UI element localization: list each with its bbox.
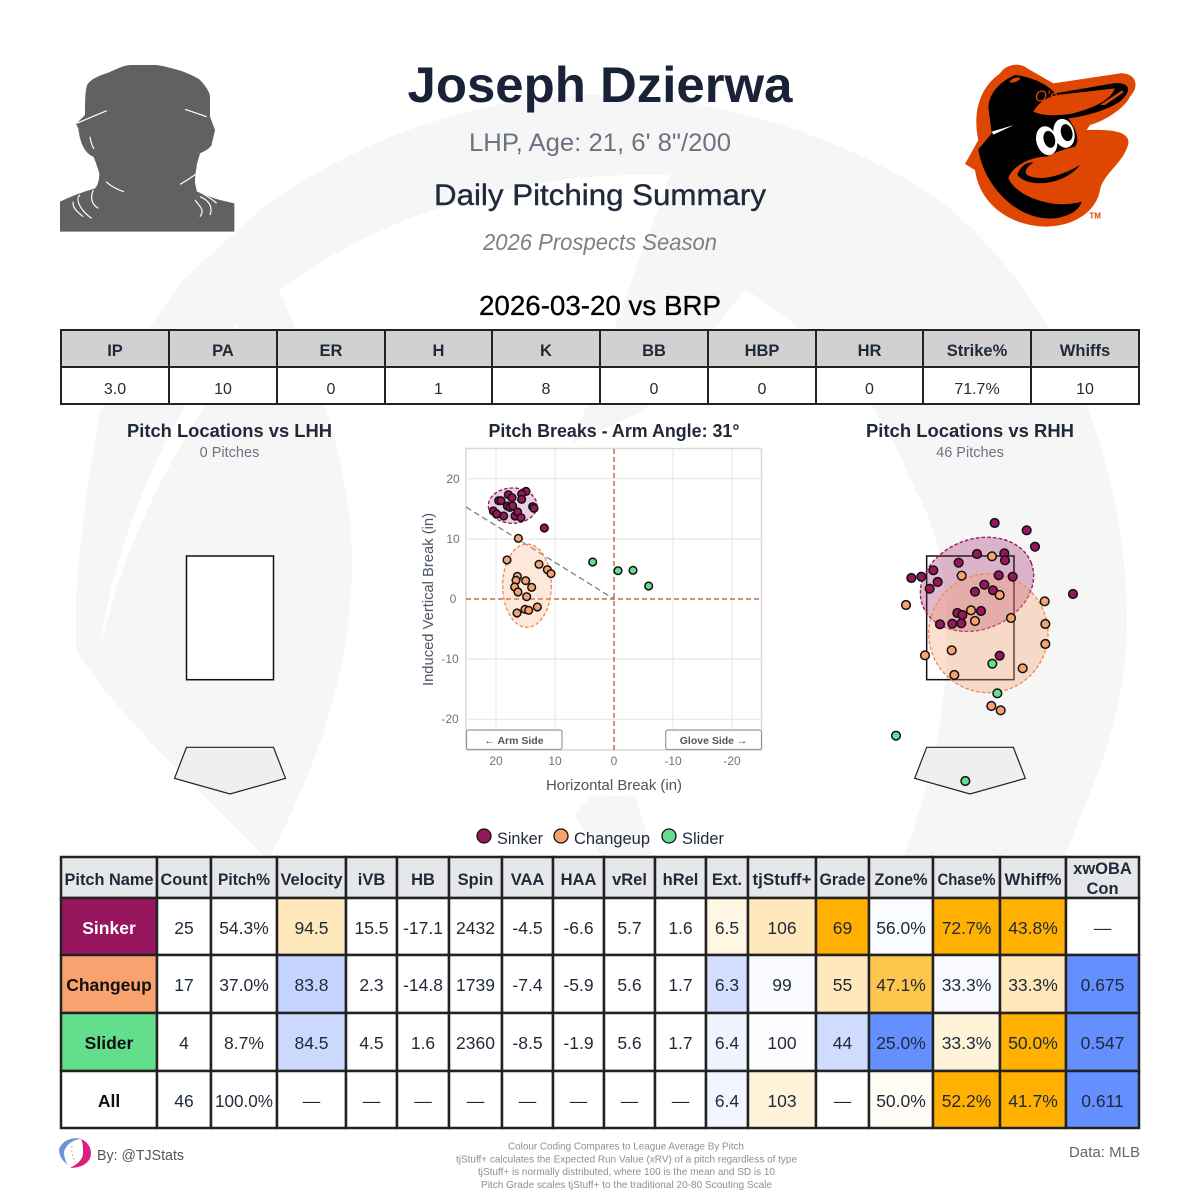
stats table header row: IP (107, 342, 123, 360)
row: Slider (61, 1013, 1139, 1071)
table header row: hRel (663, 871, 698, 889)
row: All: 46 (174, 1091, 194, 1111)
row: Sinker: 6.5 (715, 918, 739, 938)
stats table values row: 71.7% (954, 381, 1000, 398)
row: Slider: 0.547 (1081, 1033, 1124, 1053)
row: Changeup: 5.6 (617, 975, 642, 995)
row: All: — (303, 1091, 321, 1111)
glove side label: Glove Side → (680, 735, 747, 747)
table header row: Pitch% (218, 871, 270, 889)
row: Changeup: 33.3% (1008, 975, 1058, 995)
table header row: Spin (458, 871, 493, 889)
sinker location points (907, 519, 1077, 660)
y axis ticks: 0 (450, 592, 457, 606)
stats table header row: Whiffs (1060, 342, 1110, 360)
y axis ticks: 10 (446, 532, 460, 546)
x axis ticks: -20 (723, 754, 741, 768)
row: Slider: 5.6 (617, 1033, 642, 1053)
changeup location ellipse (929, 574, 1048, 693)
glove side label (666, 730, 762, 750)
y axis ticks (441, 472, 460, 726)
y axis ticks: -10 (441, 652, 459, 666)
heading: locations vs LHH: Pitch Locations vs LHH (127, 420, 332, 441)
row: Sinker: 54.3% (219, 918, 269, 938)
row: Changeup: 1.7 (668, 975, 693, 995)
table header row: vRel (612, 871, 647, 889)
icon: TJStats logo (59, 1138, 91, 1168)
row: Sinker: -17.1 (403, 918, 443, 938)
stats table header row: BB (642, 342, 666, 360)
stats table header row: HR (858, 342, 881, 360)
subtitle: Daily Pitching Summary (434, 179, 766, 212)
icon: Orioles team logo: TM (1089, 211, 1101, 220)
pitch count RHH: 46 Pitches (936, 445, 1004, 461)
title: player name: Joseph Dzierwa (408, 57, 794, 113)
row: Sinker: 72.7% (942, 918, 991, 938)
stats table values row: 10 (1076, 381, 1094, 398)
row: All: 103 (767, 1091, 797, 1111)
row: Slider: 2360 (456, 1033, 495, 1053)
home plate LHH (174, 747, 286, 794)
data source: Data: MLB (1069, 1145, 1140, 1161)
row: Changeup (61, 955, 1139, 1013)
row: All: 6.4 (715, 1091, 739, 1111)
row: Sinker: 106 (767, 918, 797, 938)
row: Sinker: 56.0% (876, 918, 926, 938)
row: Changeup: 83.8 (294, 975, 329, 995)
row: Changeup: 33.3% (942, 975, 991, 995)
slider location points (892, 659, 1002, 785)
row: Slider: 25.0% (876, 1033, 926, 1053)
heading: pitch breaks: Pitch Breaks - Arm Angle: 31° (488, 420, 740, 441)
stats table values row: 0 (865, 381, 874, 398)
row: Slider: 84.5 (294, 1033, 329, 1053)
row: Sinker: 25 (174, 918, 194, 938)
row: Sinker: 69 (833, 918, 852, 938)
x axis label: Horizontal Break (in) (546, 778, 682, 794)
row: All: — (519, 1091, 537, 1111)
row: Sinker: Sinker (82, 918, 136, 938)
table header row: Chase% (938, 871, 996, 889)
player silhouette headshot (60, 65, 234, 232)
legend (477, 829, 724, 848)
table header row: Grade (820, 871, 866, 889)
row: All: 52.2% (942, 1091, 991, 1111)
pitch count LHH: 0 Pitches (200, 445, 259, 461)
row: Sinker: 1.6 (668, 918, 693, 938)
stats table header row: H (433, 342, 444, 360)
stats table values row: 0 (327, 381, 336, 398)
table header row: Count (160, 871, 208, 889)
stats table values row: 0 (758, 381, 767, 398)
row: Slider: 44 (833, 1033, 852, 1053)
season label: 2026 Prospects Season (482, 229, 717, 255)
row: Sinker (61, 898, 1139, 955)
stats table values row: 1 (434, 381, 443, 398)
row: All: — (834, 1091, 852, 1111)
row: Changeup: 0.675 (1081, 975, 1124, 995)
row: All: — (414, 1091, 432, 1111)
table header row (61, 857, 1139, 898)
x axis ticks: 20 (489, 754, 503, 768)
row: Changeup: 37.0% (219, 975, 269, 995)
row: All: — (570, 1091, 588, 1111)
strike zone LHH (186, 556, 274, 680)
row: All (61, 1071, 1139, 1128)
row: Slider: 4.5 (359, 1033, 384, 1053)
footnotes: tjStuff+ is normally distributed, where 100 is the mean and SD is 10 (478, 1166, 775, 1178)
panel: pitch locations vs RHH (866, 420, 1077, 794)
changeup break points (503, 534, 555, 617)
stats table header row: K (540, 342, 552, 360)
row: Sinker: -4.5 (512, 918, 543, 938)
table header row: HB (411, 871, 435, 889)
row: Sinker: — (1094, 918, 1112, 938)
row: Slider: -1.9 (563, 1033, 594, 1053)
footnotes: tjStuff+ calculates the Expected Run Value (xRV) of a pitch regardless of type (456, 1154, 797, 1166)
table header row: xwOBA (1073, 860, 1132, 878)
row: Sinker: 15.5 (354, 918, 389, 938)
row: Slider: 4 (179, 1033, 189, 1053)
row: Changeup: 1739 (456, 975, 495, 995)
plot area with grid (466, 448, 762, 750)
stats table header row: HBP (745, 342, 779, 360)
arm side label: ← Arm Side (484, 735, 544, 747)
footnotes (456, 1140, 797, 1191)
table header row: Pitch Name (64, 871, 154, 889)
row: Changeup: 47.1% (876, 975, 926, 995)
stats table values row: 0 (650, 381, 659, 398)
row: Slider: 8.7% (224, 1033, 264, 1053)
row: Slider: 50.0% (1008, 1033, 1058, 1053)
legend: Sinker (497, 829, 543, 848)
table header row: HAA (561, 871, 596, 889)
row: All: 50.0% (876, 1091, 926, 1111)
row: Changeup: 17 (174, 975, 194, 995)
player bio: LHP, Age: 21, 6' 8"/200 (469, 129, 731, 157)
table header row: Zone% (874, 871, 928, 889)
stats table values row: 8 (542, 381, 551, 398)
row: Changeup: 6.3 (715, 975, 739, 995)
row: Sinker: 94.5 (294, 918, 329, 938)
x axis ticks: 10 (548, 754, 562, 768)
sinker location ellipse (906, 521, 1048, 648)
row: Sinker: 43.8% (1008, 918, 1058, 938)
arm side label (466, 730, 562, 750)
y axis label: Induced Vertical Break (in) (421, 513, 437, 686)
panel: pitch breaks chart (421, 420, 762, 794)
stats table header row: ER (320, 342, 343, 360)
legend: Changeup (574, 829, 650, 848)
row: All: — (363, 1091, 381, 1111)
changeup location points (902, 552, 1050, 715)
strike zone RHH (927, 556, 1014, 680)
row: Slider: 100 (767, 1033, 797, 1053)
table header row: Velocity (280, 871, 343, 889)
sinker break ellipse (488, 488, 537, 523)
icon: Orioles team logo: O's (1035, 89, 1058, 106)
y axis ticks: 20 (446, 472, 460, 486)
table header row: Whiff% (1004, 871, 1062, 889)
row: All: 100.0% (215, 1091, 273, 1111)
stats table header row: PA (212, 342, 234, 360)
footnotes: Colour Coding Compares to League Average By Pitch (508, 1140, 744, 1152)
row: Changeup: 55 (833, 975, 852, 995)
stats table values row (61, 367, 1139, 404)
changeup break ellipse (503, 544, 551, 627)
row: Slider: 1.6 (411, 1033, 435, 1053)
y axis ticks: -20 (441, 712, 459, 726)
row: Changeup: -5.9 (563, 975, 594, 995)
stats table values row: 3.0 (104, 381, 126, 398)
row: Changeup: -7.4 (512, 975, 543, 995)
row: Changeup: 99 (772, 975, 792, 995)
panel: pitch locations vs LHH (127, 420, 332, 794)
row: All: All (98, 1091, 120, 1111)
stats table header row (61, 330, 1139, 367)
table header row: VAA (511, 871, 544, 889)
row: Slider: 6.4 (715, 1033, 739, 1053)
home plate RHH (915, 747, 1025, 794)
row: All: — (621, 1091, 639, 1111)
row: Sinker: -6.6 (563, 918, 594, 938)
x axis ticks: -10 (664, 754, 682, 768)
x axis ticks: 0 (611, 754, 618, 768)
table header row: iVB (358, 871, 385, 889)
row: Slider: 33.3% (942, 1033, 991, 1053)
footnotes: Pitch Grade scales tjStuff+ to the traditional 20-80 Scouting Scale (481, 1179, 772, 1191)
location plot (892, 519, 1077, 794)
table header row: Con (1086, 880, 1119, 898)
stats table header row: Strike% (947, 342, 1008, 360)
row: Changeup: Changeup (66, 975, 152, 995)
row: Sinker: 2432 (456, 918, 495, 938)
row: Slider: 1.7 (668, 1033, 693, 1053)
arm angle line (466, 507, 614, 599)
row: Changeup: 2.3 (359, 975, 384, 995)
stats table values row: 10 (214, 381, 232, 398)
row: All: — (672, 1091, 690, 1111)
row: All: — (467, 1091, 485, 1111)
row: Slider: Slider (85, 1033, 133, 1053)
sinker break points (489, 487, 548, 532)
row: Changeup: -14.8 (403, 975, 443, 995)
heading: locations vs RHH: Pitch Locations vs RHH (866, 420, 1074, 441)
break scatter points (488, 487, 652, 627)
icon: Orioles team logo (965, 65, 1135, 227)
stats table (61, 330, 1139, 404)
table header row: tjStuff+ (752, 871, 812, 889)
slider break points (589, 558, 652, 590)
row: All: 0.611 (1081, 1091, 1124, 1111)
row: Slider: -8.5 (512, 1033, 543, 1053)
x axis ticks (489, 754, 741, 768)
pitch metrics table (61, 857, 1139, 1128)
row: Sinker: 5.7 (617, 918, 642, 938)
game heading: 2026-03-20 vs BRP (479, 290, 721, 321)
background watermark logo (76, 95, 1127, 860)
table header row: Ext. (712, 871, 742, 889)
row: All: 41.7% (1008, 1091, 1058, 1111)
legend: Slider (682, 829, 724, 848)
credit: by TJStats: By: @TJStats (97, 1148, 184, 1164)
